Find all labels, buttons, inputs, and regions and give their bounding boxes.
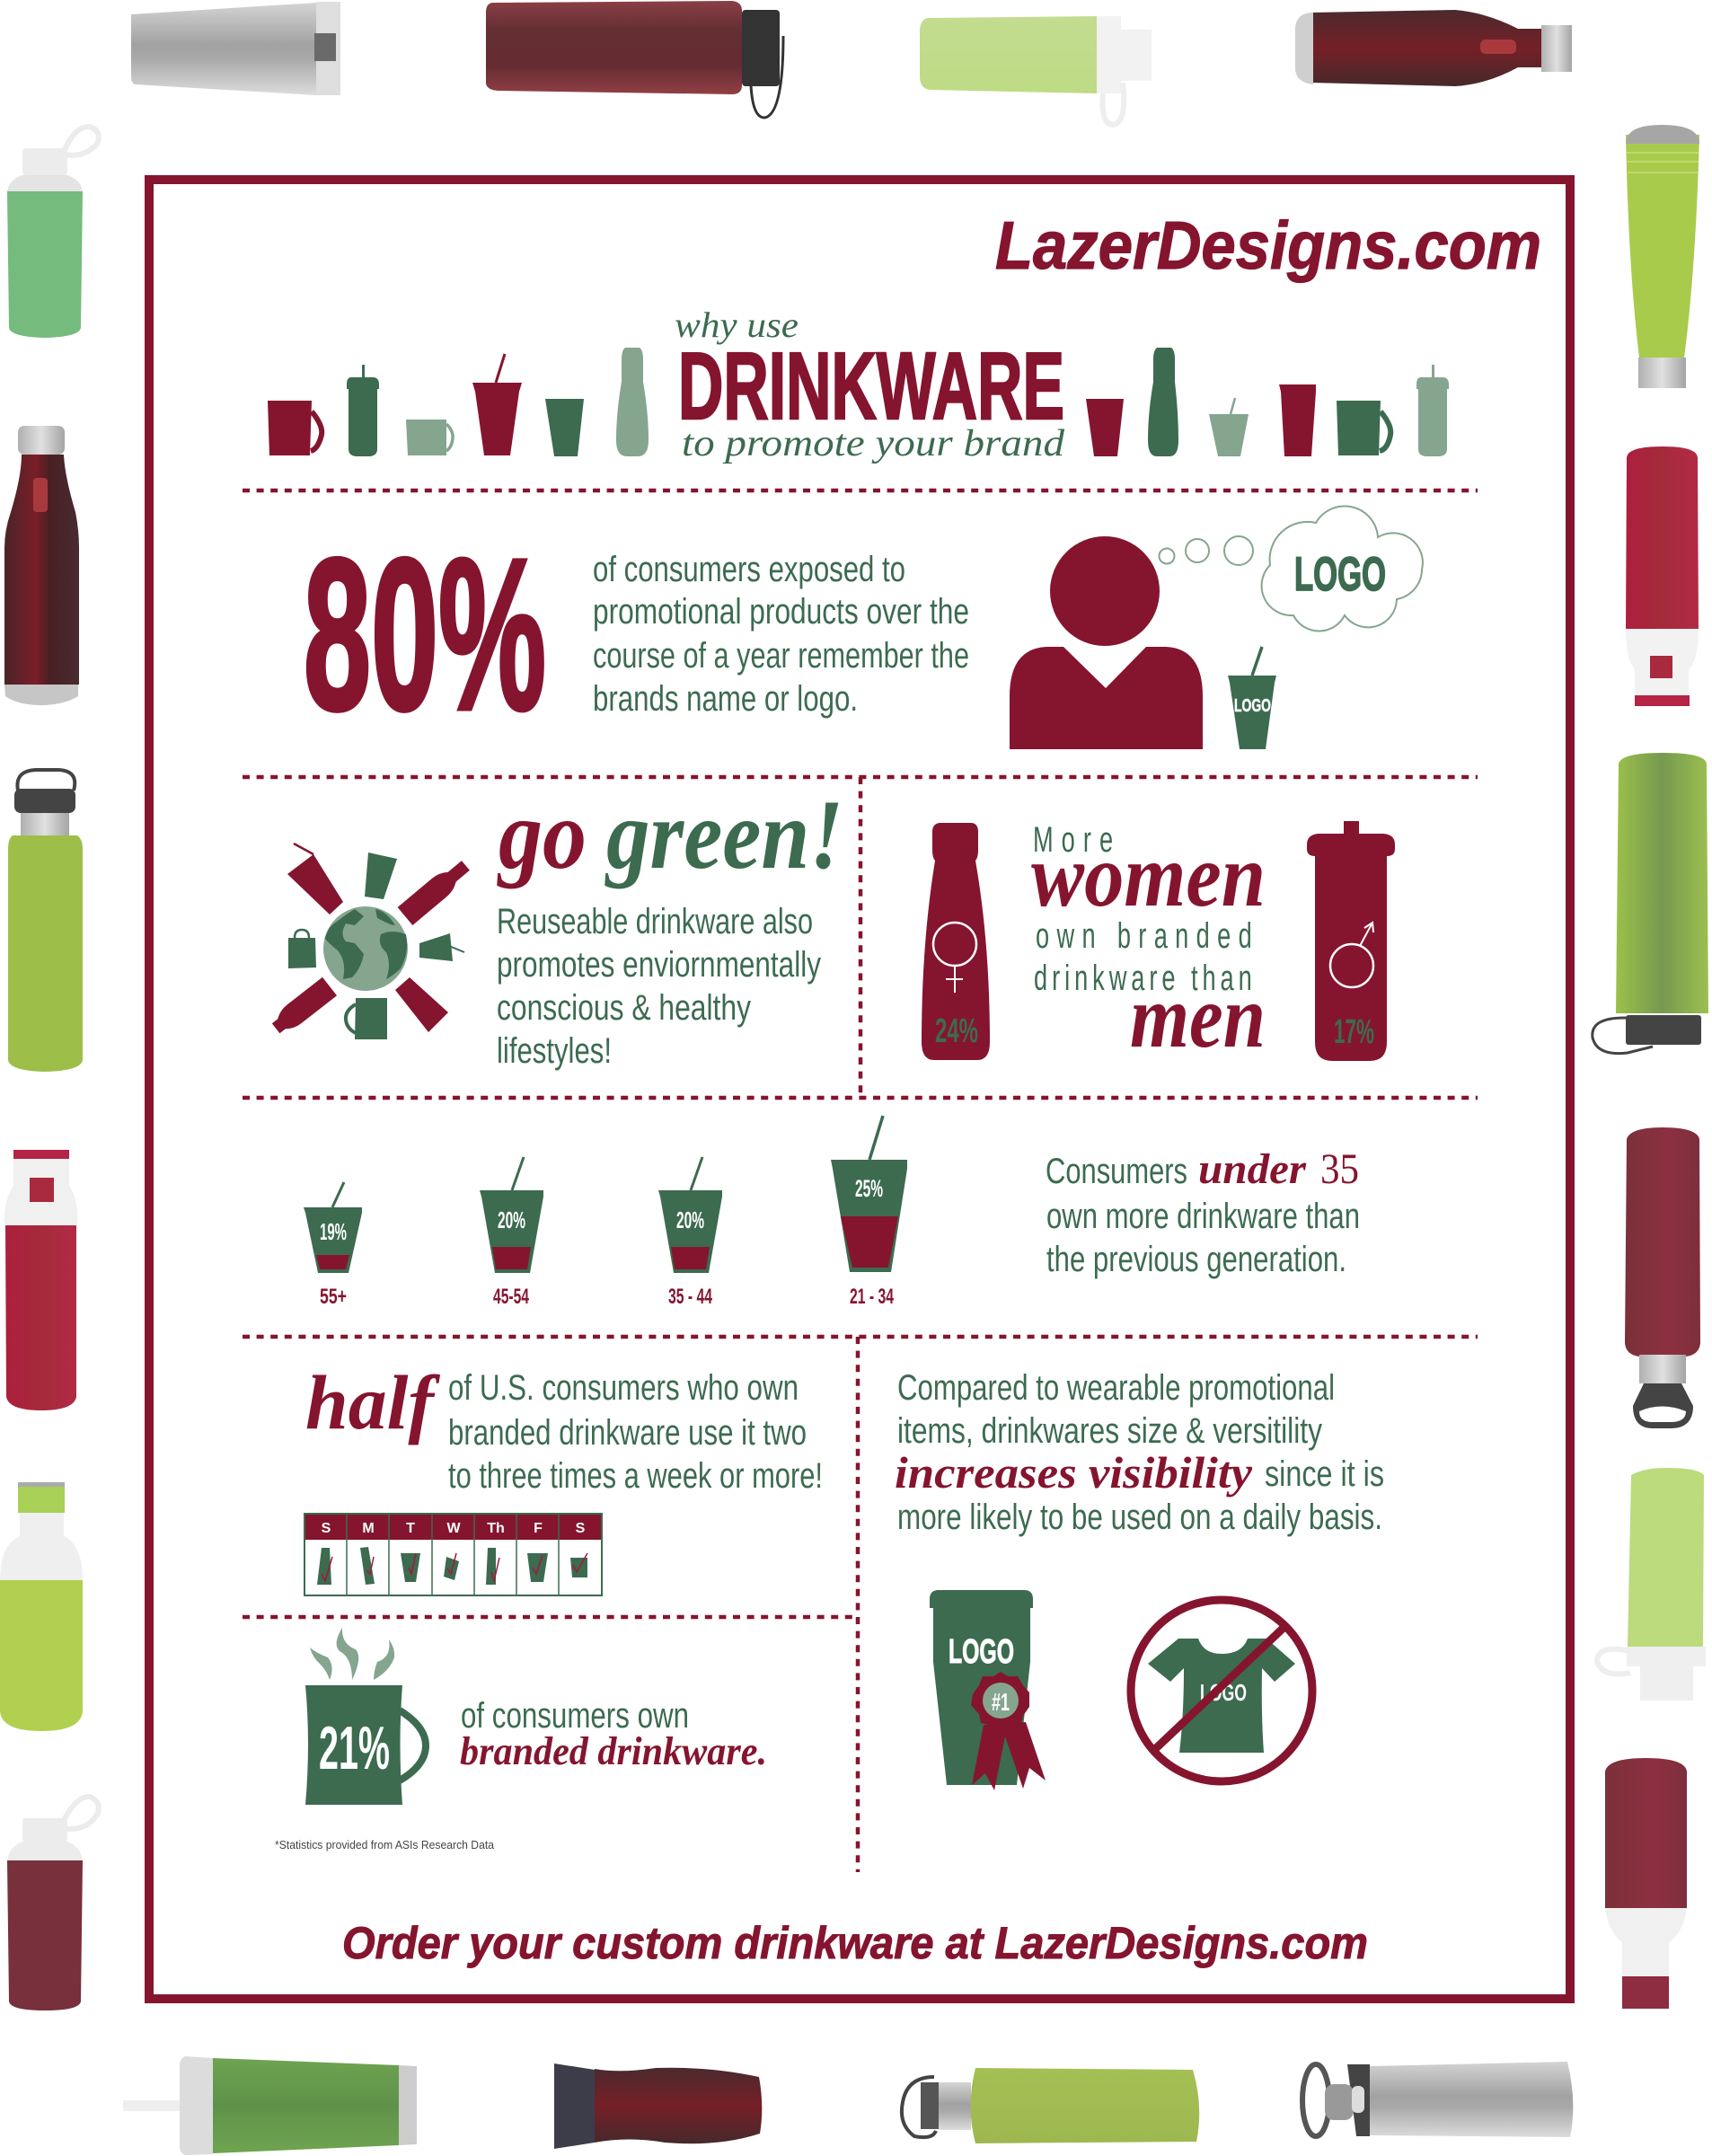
chart: drinkware ownership by age	[304, 1116, 907, 1309]
cup: 45-54 20%	[480, 1157, 543, 1309]
icon: steaming mug 21%	[305, 1628, 426, 1805]
photo: dark red bottle with steel cap	[1295, 10, 1572, 86]
calendar: days of week: Th	[487, 1521, 505, 1536]
text: go green description: Reuseable drinkware also	[497, 902, 813, 941]
icon: steaming mug 21%: 21%	[319, 1714, 390, 1782]
text: 80 percent description: brands name or logo.	[593, 679, 858, 719]
cup: 21-34 25%: 25%	[855, 1175, 883, 1202]
photo: steel tumbler	[131, 2, 340, 95]
photo: lime glass bottle left	[0, 1482, 83, 1731]
logo heading: LazerDesigns.com	[995, 208, 1541, 283]
photo: light green bottle right	[1597, 1468, 1706, 1701]
cup: 55+ 19%: 19%	[320, 1218, 347, 1245]
photo: maroon bottle with loop	[486, 1, 783, 118]
icon: male bottle 17%	[1307, 821, 1395, 1061]
heading: go green: go	[496, 780, 587, 889]
text: increases visibility: Compared to wearable promotional	[897, 1368, 1335, 1408]
photo: light green bottle with white cap	[920, 16, 1152, 125]
cup: 55+ 19%: 55+	[320, 1285, 347, 1309]
title: why use drinkware: DRINKWARE	[678, 333, 1064, 439]
icon: tumbler with award ribbon: #1	[992, 1688, 1010, 1716]
calendar: days of week: S	[322, 1521, 331, 1536]
icon: globe with drinkware rays	[269, 844, 473, 1039]
text: consumers under 35	[1046, 1145, 1360, 1279]
text: 21 percent description: of consumers own	[461, 1696, 689, 1736]
icon: cup with logo: LOGO	[1234, 696, 1271, 716]
icon: crossed-out t-shirt: LOGO	[1200, 1679, 1247, 1706]
cup: 35-44 20%	[658, 1157, 722, 1309]
photo: green glass bottle left	[7, 127, 99, 338]
text: go green description: lifestyles!	[497, 1031, 612, 1071]
text: go green description: conscious & healthy	[497, 988, 751, 1028]
frame border	[149, 180, 1570, 1999]
text: increases visibility	[895, 1368, 1384, 1537]
text: 21 percent description: branded drinkware.	[460, 1729, 767, 1773]
text: more women than men: women	[1031, 826, 1266, 925]
cup: 45-54 20%: 45-54	[493, 1285, 529, 1309]
calendar: days of week	[304, 1514, 602, 1595]
calendar: days of week: F	[534, 1521, 543, 1536]
icon: male bottle 17%: 17%	[1334, 1013, 1374, 1051]
photo: red bottle right	[1626, 446, 1699, 706]
photo: lime tapered tumbler right	[1626, 125, 1699, 388]
cup: 35-44 20%: 20%	[676, 1206, 704, 1233]
icon: female bottle 24%: 24%	[935, 1012, 978, 1050]
text: 80 percent description: of consumers exposed to	[593, 550, 905, 589]
title: why use drinkware: why use	[675, 305, 799, 345]
text: consumers under 35: Consumers	[1046, 1152, 1187, 1191]
title: why use drinkware: to promote your brand	[682, 423, 1065, 464]
text: more women than men: drinkware than	[1034, 959, 1252, 998]
title: why use drinkware	[675, 305, 1065, 464]
text: 21 percent description	[460, 1696, 767, 1773]
icon: thought bubble with logo: LOGO	[1294, 548, 1386, 601]
text: more women than men: More	[1033, 820, 1113, 860]
calendar: days of week: S	[576, 1521, 586, 1536]
photo: lime bottle with dark cap right	[1593, 753, 1708, 1054]
icon: tumbler with award ribbon: LOGO	[949, 1633, 1014, 1671]
text: increases visibility: increases visibility	[895, 1447, 1253, 1498]
text: more women than men	[1031, 820, 1266, 1066]
text: more women than men: own branded	[1036, 916, 1252, 956]
icon: crossed-out t-shirt	[1131, 1600, 1312, 1781]
photo: dark red bottle left	[4, 426, 79, 705]
text: go green description	[497, 902, 821, 1071]
icon: thought bubble with logo	[1159, 506, 1423, 631]
cup: 45-54 20%: 20%	[498, 1206, 525, 1233]
icon row right	[1086, 348, 1449, 456]
text: half of consumers: branded drinkware use it two	[448, 1413, 807, 1453]
text: consumers under 35: the previous generation.	[1046, 1240, 1346, 1279]
text: 80 percent description: promotional products over the	[593, 592, 969, 632]
calendar: days of week: W	[446, 1521, 461, 1536]
photo: lime bottle with dark cap	[8, 770, 83, 1072]
cup: 35-44 20%: 35 - 44	[668, 1285, 712, 1309]
heading: go green	[496, 780, 843, 889]
photo: lime bottle with loop	[902, 2068, 1199, 2143]
text: more women than men: men	[1130, 967, 1266, 1066]
photo: maroon travel mug	[554, 2063, 762, 2149]
icon: female bottle 24%	[922, 823, 990, 1060]
text: increases visibility: items, drinkwares size & versitility	[897, 1411, 1322, 1451]
photo: maroon glass bottle right	[1605, 1758, 1687, 2009]
calendar: days of week: M	[362, 1521, 375, 1536]
text: 80 percent description	[593, 550, 969, 719]
text: go green description: promotes enviornmentally	[497, 945, 821, 985]
call to action: Order your custom drinkware at LazerDesigns.com	[342, 1918, 1368, 1968]
icon row left	[268, 348, 649, 456]
text: half of consumers	[448, 1368, 823, 1496]
icon: tumbler with award ribbon	[930, 1590, 1046, 1790]
section dividers	[243, 490, 1478, 1872]
text: consumers under 35: under	[1198, 1145, 1307, 1193]
stat: 80%: 80%	[304, 514, 546, 755]
cup: 21-34 25%	[831, 1116, 907, 1309]
photo: maroon glass bottle left	[7, 1797, 99, 2010]
text: half of consumers: to three times a week or more!	[448, 1456, 823, 1496]
text: consumers under 35: own more drinkware than	[1046, 1197, 1360, 1236]
heading: half: half	[305, 1359, 440, 1445]
heading: go green: green!	[604, 780, 843, 889]
calendar: days of week: T	[406, 1521, 415, 1536]
icon: person	[1010, 536, 1203, 749]
icon: cup with logo	[1228, 647, 1276, 749]
cup: 21-34 25%: 21 - 34	[850, 1285, 894, 1309]
photo: green tumbler with straw	[123, 2056, 417, 2155]
text: half of consumers: of U.S. consumers who own	[448, 1368, 799, 1408]
cup: 55+ 19%	[304, 1182, 362, 1309]
photo: red bottle left	[4, 1150, 77, 1410]
text: increases visibility: since it is	[1265, 1454, 1384, 1494]
text: consumers under 35: 35	[1320, 1145, 1359, 1193]
photo: steel bottle with loop	[1302, 2062, 1573, 2137]
text: 80 percent description: course of a year remember the	[593, 636, 969, 676]
photo: maroon bottle right	[1625, 1127, 1700, 1428]
text: increases visibility: more likely to be used on a daily basis.	[897, 1498, 1382, 1537]
footnote: *Statistics provided from ASIs Research Data	[275, 1838, 495, 1851]
